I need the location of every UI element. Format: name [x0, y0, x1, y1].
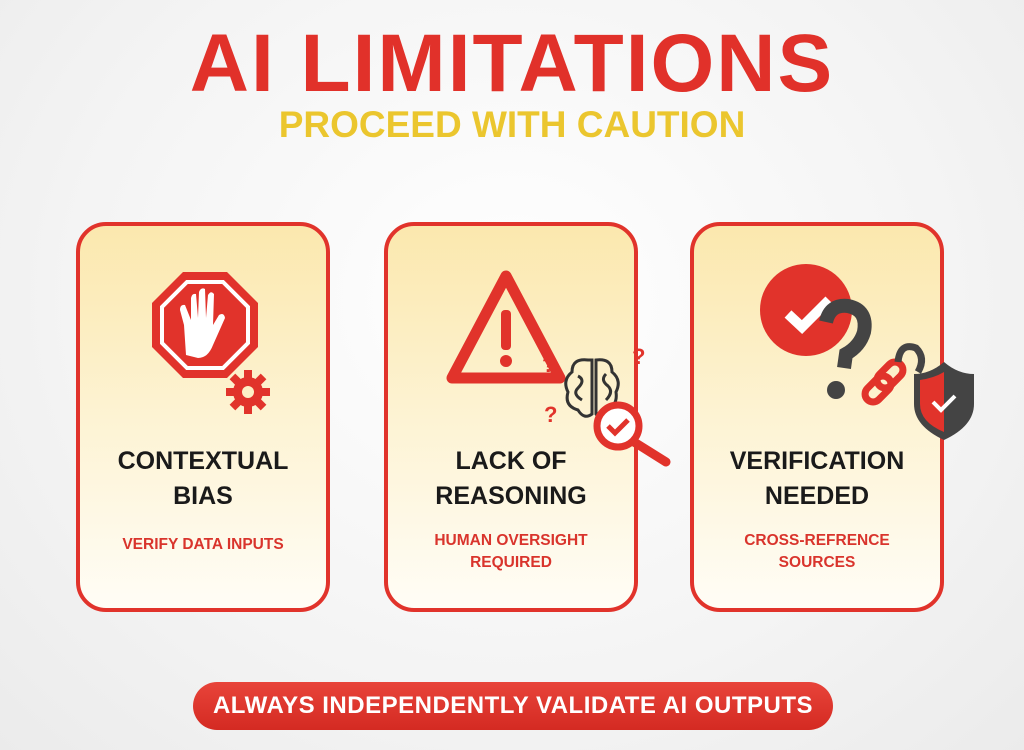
heading [435, 447, 587, 510]
banner: ALWAYS INDEPENDENTLY VALIDATE AI OUTPUTS [213, 692, 813, 719]
heading [730, 447, 904, 510]
icon: warning, brain, magnifier: ? [542, 352, 555, 377]
heading: REASONING [435, 482, 587, 510]
text: action [434, 532, 588, 571]
panel: lack of reasoning [384, 222, 638, 612]
heading: BIAS [173, 482, 233, 510]
text: action: VERIFY DATA INPUTS [122, 536, 284, 553]
title: AI LIMITATIONS [190, 18, 834, 109]
heading: NEEDED [765, 482, 869, 510]
subtitle: PROCEED WITH CAUTION [279, 104, 745, 145]
text: action: CROSS-REFRENCE [744, 532, 890, 549]
text: action [744, 532, 890, 571]
icon: warning, brain, magnifier [446, 270, 670, 466]
heading [118, 447, 288, 510]
icon: stop hand with gear [152, 272, 270, 414]
heading: LACK OF [455, 447, 567, 475]
heading: CONTEXTUAL [118, 447, 288, 475]
text: action: HUMAN OVERSIGHT [434, 532, 588, 549]
heading: VERIFICATION [730, 447, 904, 475]
text: ? [632, 344, 645, 369]
text: action: REQUIRED [470, 554, 552, 571]
panel: verification needed [690, 222, 944, 612]
icon: warning, brain, magnifier: ? [544, 402, 557, 427]
panel: contextual bias [76, 222, 330, 612]
banner [193, 682, 833, 730]
icon: check, question, link, shield [760, 264, 974, 440]
text: action: SOURCES [779, 554, 855, 571]
